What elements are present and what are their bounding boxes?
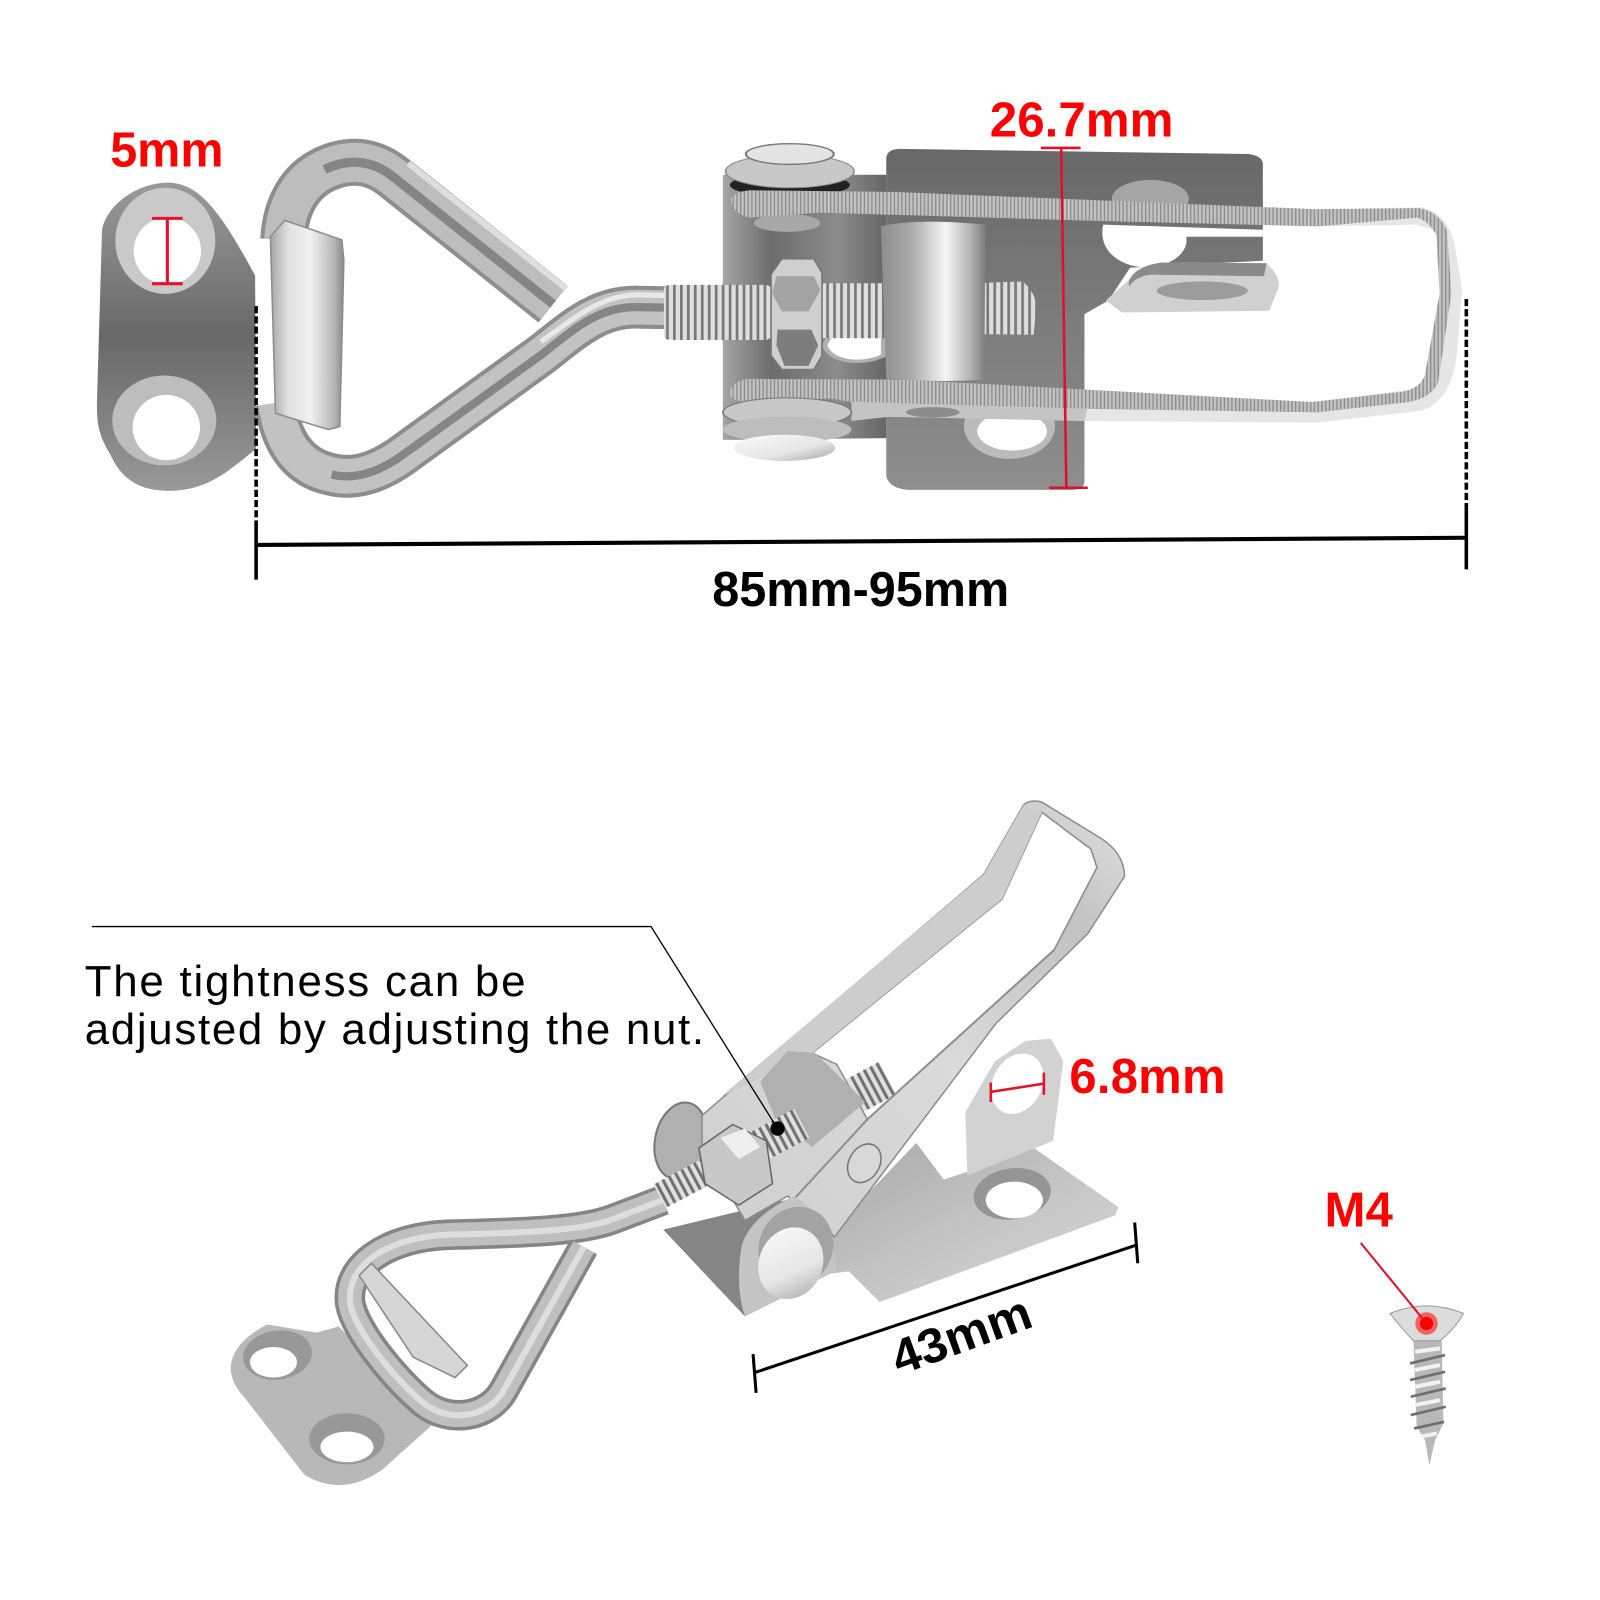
pivot end (739, 1196, 837, 1316)
height dimension: 26.7mm (990, 94, 1173, 488)
height dimension: 26.7mm: 26.7mm (990, 94, 1173, 148)
lever handle (851, 207, 1462, 423)
sliding cylinder (760, 1051, 865, 1147)
callout text: adjusted by adjusting the nut. (85, 1005, 704, 1054)
screw (1390, 1306, 1463, 1465)
back rivet (648, 1098, 714, 1184)
screw size callout: M4 (1324, 1184, 1438, 1335)
bolt thread behind (847, 1062, 896, 1112)
slot dimension: 6.8mm (991, 1050, 1226, 1104)
latch body (664, 144, 1462, 490)
wire sleeve (270, 220, 344, 430)
hole dimension: 5mm (110, 123, 223, 284)
lower bolt (723, 398, 851, 461)
screw shank (1413, 1340, 1443, 1465)
screw size callout: M4: M4 (1324, 1184, 1393, 1238)
lever handle (702, 801, 1124, 1237)
top latch assembly (97, 144, 1462, 491)
callout text: The tightness can be (85, 957, 526, 1006)
slot dimension: 6.8mm: 6.8mm (1069, 1050, 1226, 1104)
top width dimension line (256, 299, 1466, 580)
mount tab (1106, 263, 1279, 312)
screw threads (1410, 1355, 1446, 1428)
screw head (1390, 1306, 1463, 1341)
wire sleeve (359, 1263, 467, 1378)
upper bolt (726, 144, 854, 232)
callout pointer dot (770, 1121, 785, 1136)
base width dimension (753, 1222, 1138, 1393)
wire hook (276, 162, 694, 476)
threaded rod and nut (653, 1109, 809, 1208)
adjusting nut (771, 259, 822, 369)
lever rivet (841, 1138, 888, 1189)
base plate (663, 1039, 1118, 1316)
keeper plate (97, 183, 256, 491)
bottom latch assembly (231, 801, 1124, 1485)
threaded rod (664, 285, 771, 340)
base width dimension: 43mm (884, 1286, 1039, 1386)
label: 85mm-95mm: 85mm-95mm (712, 563, 1009, 617)
keeper plate (231, 1324, 434, 1485)
sliding cylinder (881, 222, 985, 381)
callout text (85, 957, 704, 1054)
front rivet (745, 1194, 846, 1299)
left bracket (723, 175, 886, 440)
wire hook (350, 1200, 663, 1415)
callout leader line (92, 927, 778, 1129)
hole dimension: 5mm: 5mm (110, 123, 223, 177)
main plate (886, 149, 1263, 490)
